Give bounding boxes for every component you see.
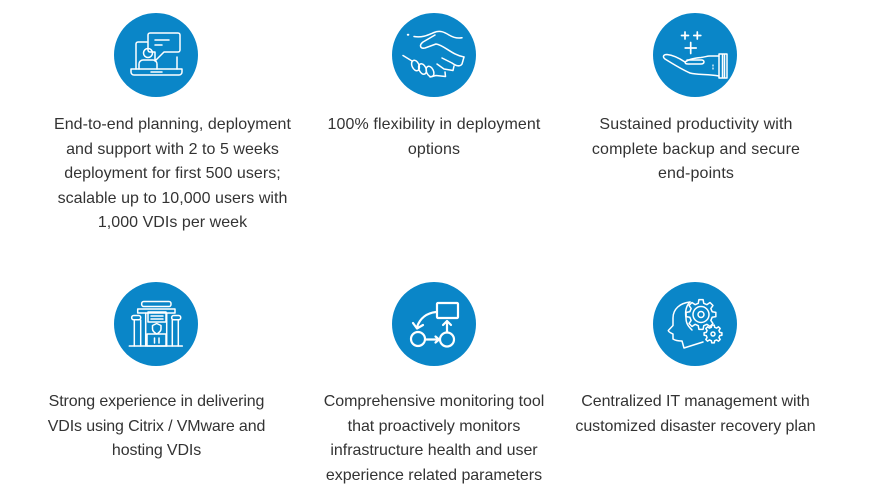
text: centralized IT management: customized disaster recovery plan: [575, 418, 816, 434]
text: end-to-end planning: and support with 2 to 5 weeks: [66, 140, 279, 158]
icon: laptop with person and speech bubble: [114, 13, 198, 97]
text: monitoring tool: experience related parameters: [326, 466, 542, 484]
text: flexibility: options: [408, 140, 460, 158]
icon: head with gears: [653, 282, 737, 366]
text: end-to-end planning: End-to-end planning, deployment: [54, 116, 291, 133]
text: end-to-end planning: [54, 116, 291, 231]
text: monitoring tool: [324, 393, 544, 484]
icon: handshake: [392, 13, 476, 97]
text: VDI experience: hosting VDIs: [112, 442, 201, 459]
icon: open hand with plus signs: [653, 13, 737, 97]
text: VDI experience: [48, 393, 265, 459]
text: sustained productivity: [592, 116, 800, 182]
text: flexibility: [328, 116, 540, 158]
text: VDI experience: VDIs using Citrix / VMware and: [48, 418, 265, 434]
text: monitoring tool: infrastructure health and user: [330, 442, 538, 459]
text: end-to-end planning: 1,000 VDIs per week: [98, 214, 247, 231]
text: end-to-end planning: deployment for first 500 users;: [64, 165, 281, 182]
text: centralized IT management: [575, 393, 816, 434]
text: VDI experience: Strong experience in delivering: [49, 393, 264, 410]
text: monitoring tool: Comprehensive monitoring tool: [324, 393, 544, 410]
icon: office building with shield: [114, 282, 198, 366]
text: end-to-end planning: scalable up to 10,000 users with: [58, 190, 287, 206]
icon: process flow with circles and square: [392, 282, 476, 366]
text: flexibility: 100% flexibility in deployment: [328, 116, 540, 133]
text: sustained productivity: Sustained productivity with: [599, 116, 793, 133]
text: centralized IT management: Centralized IT management with: [581, 393, 810, 410]
text: sustained productivity: end-points: [658, 165, 734, 182]
text: monitoring tool: that proactively monitors: [348, 418, 520, 434]
text: sustained productivity: complete backup and secure: [592, 140, 800, 158]
